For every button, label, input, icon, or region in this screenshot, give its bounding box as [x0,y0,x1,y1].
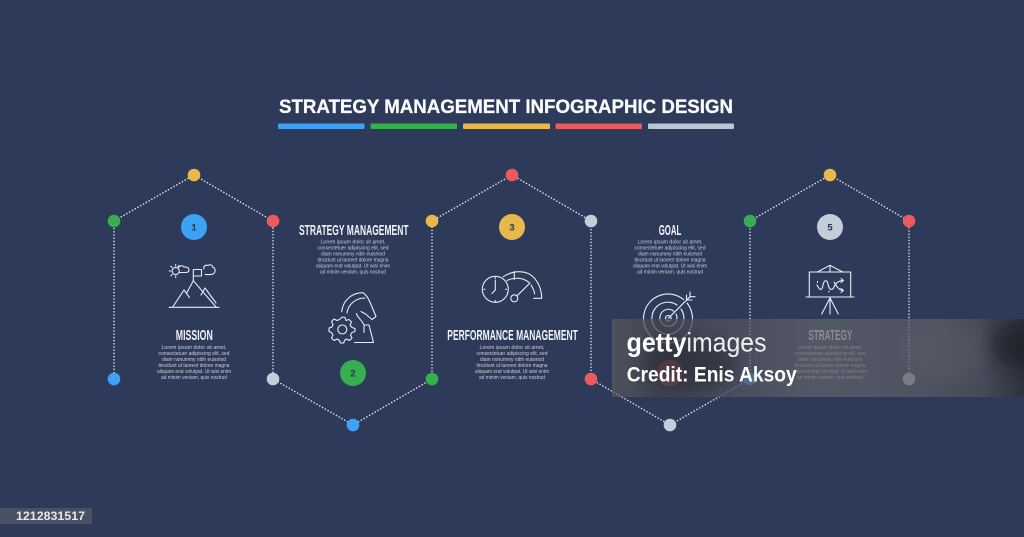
text block: performance management: tincidunt ut laoreet dolore magna [476,363,548,369]
heading: mission: MISSION [176,328,213,344]
text block: goal: ad minim veniam, quis nostrud [637,270,703,276]
text block: strategy: Lorem ipsum dolor sit amet, [798,345,862,351]
number badge 2 [340,360,366,386]
panel: step 1 mission [157,214,231,381]
heading: strategy: STRATEGY [808,328,852,344]
text block: mission: consectetuer adipiscing elit, sed [158,351,230,357]
number badge 4 [657,360,683,386]
icon: target with arrow [644,292,695,343]
number badge 4: 4 [667,368,673,380]
text block: strategy: ad minim veniam, quis nostrud [797,375,863,381]
number badge 1 [181,214,207,240]
connector nodes [108,169,915,431]
text block: mission: Lorem ipsum dolor sit amet, [162,345,226,351]
number badge 5: 5 [827,222,833,234]
text block: strategy management: Lorem ipsum dolor sit amet, [320,240,386,246]
text block: strategy: diam nonummy nibh euismod [798,357,862,363]
text block: mission: tincidunt ut laoreet dolore magna [158,363,230,369]
dotted hexagon connector lines [114,175,909,425]
text block: performance management [475,345,549,381]
image id stamp [0,508,92,524]
text block: goal: aliquam erat volutpat. Ut wisi enim [633,264,707,270]
panel: step 4 goal [633,223,707,386]
text block: mission [157,345,231,381]
text block: mission: aliquam erat volutpat. Ut wisi enim [157,369,231,375]
text block: strategy management [316,240,390,276]
text block: goal: tincidunt ut laoreet dolore magna [634,258,706,264]
text block: performance management: aliquam erat volutpat. Ut wisi enim [475,369,549,375]
icon: mountain with flag [169,264,219,307]
panel: step 3 performance management [447,214,578,381]
text block: strategy: tincidunt ut laoreet dolore magna [794,363,866,369]
text block: strategy: aliquam erat volutpat. Ut wisi enim [793,369,867,375]
title colour bars [278,124,734,129]
text block: strategy management: diam nonummy nibh euismod [321,252,385,258]
heading: strategy management: STRATEGY MANAGEMENT [299,223,409,239]
text block: goal: diam nonummy nibh euismod [638,252,702,258]
text block: strategy management: tincidunt ut laoreet dolore magna [318,258,389,264]
text block: strategy management: ad minim veniam, quis nostrud [320,270,386,276]
number badge 3 [499,214,525,240]
heading: performance management: PERFORMANCE MANAGEMENT [447,328,578,344]
text block: performance management: Lorem ipsum dolor sit amet, [480,345,544,351]
text block: strategy management: aliquam erat volutpat. Ut wisi enim [316,264,390,270]
text block: strategy [793,345,867,381]
number badge 2: 2 [350,368,356,380]
text block: strategy management: consectetuer adipiscing elit, sed [318,246,389,252]
title: STRATEGY MANAGEMENT INFOGRAPHIC DESIGN [279,96,733,118]
watermark band: images [686,328,766,358]
text block: mission: diam nonummy nibh euismod [162,357,226,363]
watermark credit: Credit: Enis Aksoy [627,364,797,387]
icon: chess knight with gear [329,293,376,343]
text block: mission: ad minim veniam, quis nostrud [161,375,227,381]
text block: goal: Lorem ipsum dolor sit amet, [638,240,702,246]
text block: performance management: ad minim veniam, quis nostrud [479,375,545,381]
icon: presentation board [806,265,854,314]
watermark band [612,318,1024,397]
text block: strategy: consectetuer adipiscing elit, sed [794,351,866,357]
image id stamp: 1212831517 [16,511,85,523]
number badge 1: 1 [191,222,197,234]
text block: performance management: diam nonummy nibh euismod [480,357,544,363]
text block: performance management: consectetuer adipiscing elit, sed [476,351,548,357]
icon: clock and speedometer [482,272,542,302]
panel: step 2 strategy management [299,223,409,386]
number badge 5 [817,214,843,240]
heading: goal: GOAL [659,223,681,239]
watermark logo: getty [626,328,686,358]
text block: goal: consectetuer adipiscing elit, sed [634,246,706,252]
text block: goal [633,240,707,276]
number badge 3: 3 [509,222,515,234]
panel: step 5 strategy [793,214,867,381]
